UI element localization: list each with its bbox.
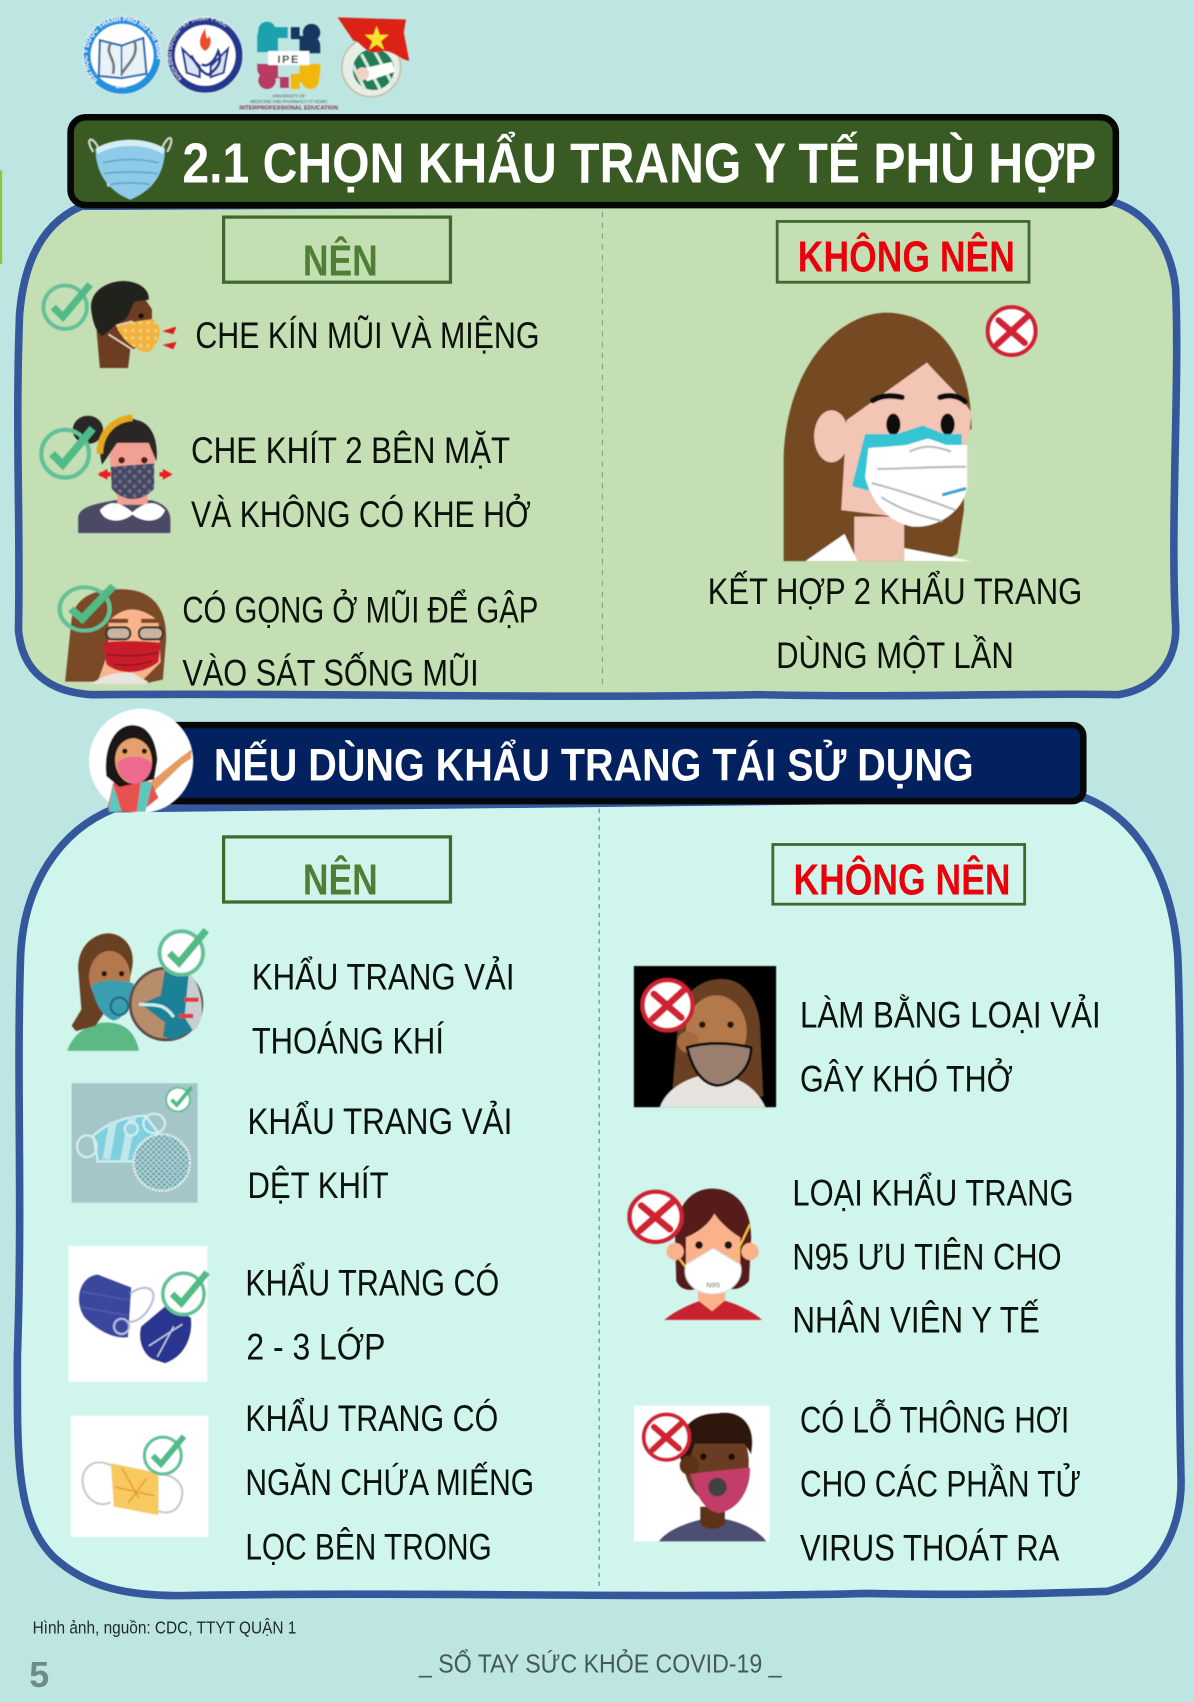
label text bbox=[252, 955, 515, 1061]
box: không nên (section 2) bbox=[773, 844, 1025, 904]
header bar: tái sử dụng bbox=[147, 725, 1083, 801]
icon: cross mark bbox=[988, 307, 1036, 355]
item: khẩu trang vải thoáng khí bbox=[67, 930, 515, 1061]
icon: yellow cloth mask with filter pocket bbox=[71, 1415, 208, 1537]
item: che khít 2 bên mặt bbox=[41, 416, 531, 535]
box: không nên (section 2): KHÔNG NÊN bbox=[793, 855, 1011, 904]
panel: khẩu trang tái sử dụng bbox=[17, 798, 1181, 1596]
label text bbox=[800, 994, 1101, 1099]
icon: man with valve mask bbox=[634, 1406, 770, 1541]
item: kết hợp 2 khẩu trang bbox=[708, 307, 1082, 676]
label text bbox=[245, 1261, 499, 1368]
label text: DÙNG MỘT LẦN bbox=[776, 635, 1014, 676]
label text: CÓ GỌNG Ở MŨI ĐỂ GẬP bbox=[182, 589, 538, 631]
label text: CHE KÍN MŨI VÀ MIỆNG bbox=[195, 315, 539, 356]
item: khẩu trang vải dệt khít bbox=[72, 1083, 512, 1206]
icon: tightly woven mask bbox=[72, 1083, 198, 1203]
panel background bbox=[17, 798, 1181, 1596]
panel: chọn khẩu trang bbox=[18, 202, 1177, 696]
label text: KHẨU TRANG VẢI bbox=[252, 955, 515, 997]
label text: CHE KHÍT 2 BÊN MẶT bbox=[191, 430, 510, 471]
label text: 2 - 3 LỚP bbox=[246, 1327, 385, 1368]
icon: man side view with mask bbox=[43, 281, 176, 368]
icon: surgical mask bbox=[89, 138, 171, 200]
icon: woman wearing N95: N95 bbox=[706, 1280, 720, 1289]
label text: LOẠI KHẨU TRANG bbox=[792, 1171, 1074, 1213]
page number: 5 bbox=[29, 1655, 49, 1695]
logo: IPE: IPE bbox=[278, 54, 300, 66]
label text: GÂY KHÓ THỞ bbox=[800, 1057, 1013, 1099]
logos row bbox=[82, 15, 410, 112]
item: n95 ưu tiên cho nhân viên y tế bbox=[630, 1171, 1074, 1340]
title: NẾU DÙNG KHẨU TRANG TÁI SỬ DỤNG bbox=[214, 739, 974, 791]
label text: CÓ LỖ THÔNG HƠI bbox=[800, 1398, 1069, 1440]
logo: IPE: MEDICINE AND PHARMACY AT HCMC bbox=[250, 99, 327, 104]
logo: IPE bbox=[239, 22, 338, 112]
item: khẩu trang có 2-3 lớp bbox=[68, 1246, 499, 1382]
box: nên (section 2): NÊN bbox=[303, 855, 378, 904]
label text: VIRUS THOÁT RA bbox=[800, 1527, 1060, 1568]
label text: NHÂN VIÊN Y TẾ bbox=[792, 1299, 1040, 1340]
column divider bbox=[601, 212, 603, 689]
box: nên (section 2) bbox=[224, 837, 450, 904]
label text: KHẨU TRANG CÓ bbox=[245, 1261, 499, 1303]
icon: woman with patterned mask bbox=[41, 416, 173, 533]
label text: THOÁNG KHÍ bbox=[252, 1020, 445, 1061]
box: nên (section 1): NÊN bbox=[303, 237, 378, 286]
label text: KHẨU TRANG CÓ bbox=[245, 1397, 498, 1439]
box: không nên (section 1) bbox=[777, 221, 1029, 282]
logo: IPE: INTERPROFESSIONAL EDUCATION bbox=[239, 106, 338, 112]
logo: university of medicine and pharmacy: 1947 bbox=[116, 84, 128, 90]
label text bbox=[245, 1397, 534, 1567]
column divider bbox=[598, 809, 600, 1590]
label text: LỌC BÊN TRONG bbox=[245, 1526, 492, 1567]
label text bbox=[792, 1171, 1074, 1340]
icon: woman wearing N95 bbox=[630, 1189, 762, 1320]
label text: VÀ KHÔNG CÓ KHE HỞ bbox=[191, 493, 531, 535]
box: không nên (section 1): KHÔNG NÊN bbox=[798, 232, 1015, 281]
logo: university of medicine and pharmacy: ĐẠI HỌC Y DƯỢC THÀNH PHỐ HỒ CHÍ MINH bbox=[82, 16, 162, 83]
label text: LÀM BẰNG LOẠI VẢI bbox=[800, 994, 1101, 1035]
label text: N95 ƯU TIÊN CHO bbox=[792, 1236, 1062, 1277]
logo: faculty emblem: KHOA ĐIỀU DƯỠNG - KỸ THUẬT Y HỌC bbox=[167, 15, 228, 81]
item: che kín mũi và miệng bbox=[43, 281, 539, 368]
footer title: _ SỔ TAY SỨC KHỎE COVID-19 _ bbox=[418, 1649, 782, 1679]
icon: girl with breathable cloth mask bbox=[67, 930, 206, 1051]
label text: DỆT KHÍT bbox=[247, 1165, 389, 1206]
logo: faculty emblem bbox=[166, 15, 244, 94]
item: có lỗ thông hơi bbox=[634, 1398, 1081, 1568]
item: có gọng ở mũi bbox=[60, 586, 538, 693]
header bar: chọn khẩu trang bbox=[71, 117, 1116, 205]
icon: woman wearing two masks bbox=[784, 313, 971, 561]
icon: woman with thin mask on black bbox=[634, 966, 776, 1107]
icon: girl avatar waving bbox=[89, 709, 193, 813]
logo: youth union flag bbox=[338, 17, 409, 97]
source note: Hình ảnh, nguồn: CDC, TTYT QUẬN 1 bbox=[33, 1618, 296, 1638]
icon: layered navy masks bbox=[68, 1246, 207, 1382]
logo: IPE: UNIVERSITY OF bbox=[272, 94, 306, 99]
label text bbox=[182, 589, 538, 693]
label text bbox=[247, 1100, 512, 1206]
label text: KẾT HỢP 2 KHẨU TRANG bbox=[708, 570, 1082, 612]
label text bbox=[800, 1398, 1081, 1568]
label text: NGĂN CHỨA MIẾNG bbox=[245, 1462, 534, 1503]
label text bbox=[191, 430, 531, 535]
label text bbox=[708, 570, 1082, 676]
item: khẩu trang có ngăn lọc bbox=[71, 1397, 534, 1567]
label text: VÀO SÁT SỐNG MŨI bbox=[182, 651, 479, 693]
icon: woman with glasses and red mask bbox=[60, 586, 166, 684]
label text: CHO CÁC PHẦN TỬ bbox=[800, 1462, 1081, 1504]
box: nên (section 1) bbox=[224, 217, 450, 286]
item: làm bằng loại vải gây khó thở bbox=[634, 966, 1101, 1107]
label text: KHẨU TRANG VẢI bbox=[247, 1100, 512, 1142]
panel background bbox=[18, 202, 1177, 696]
